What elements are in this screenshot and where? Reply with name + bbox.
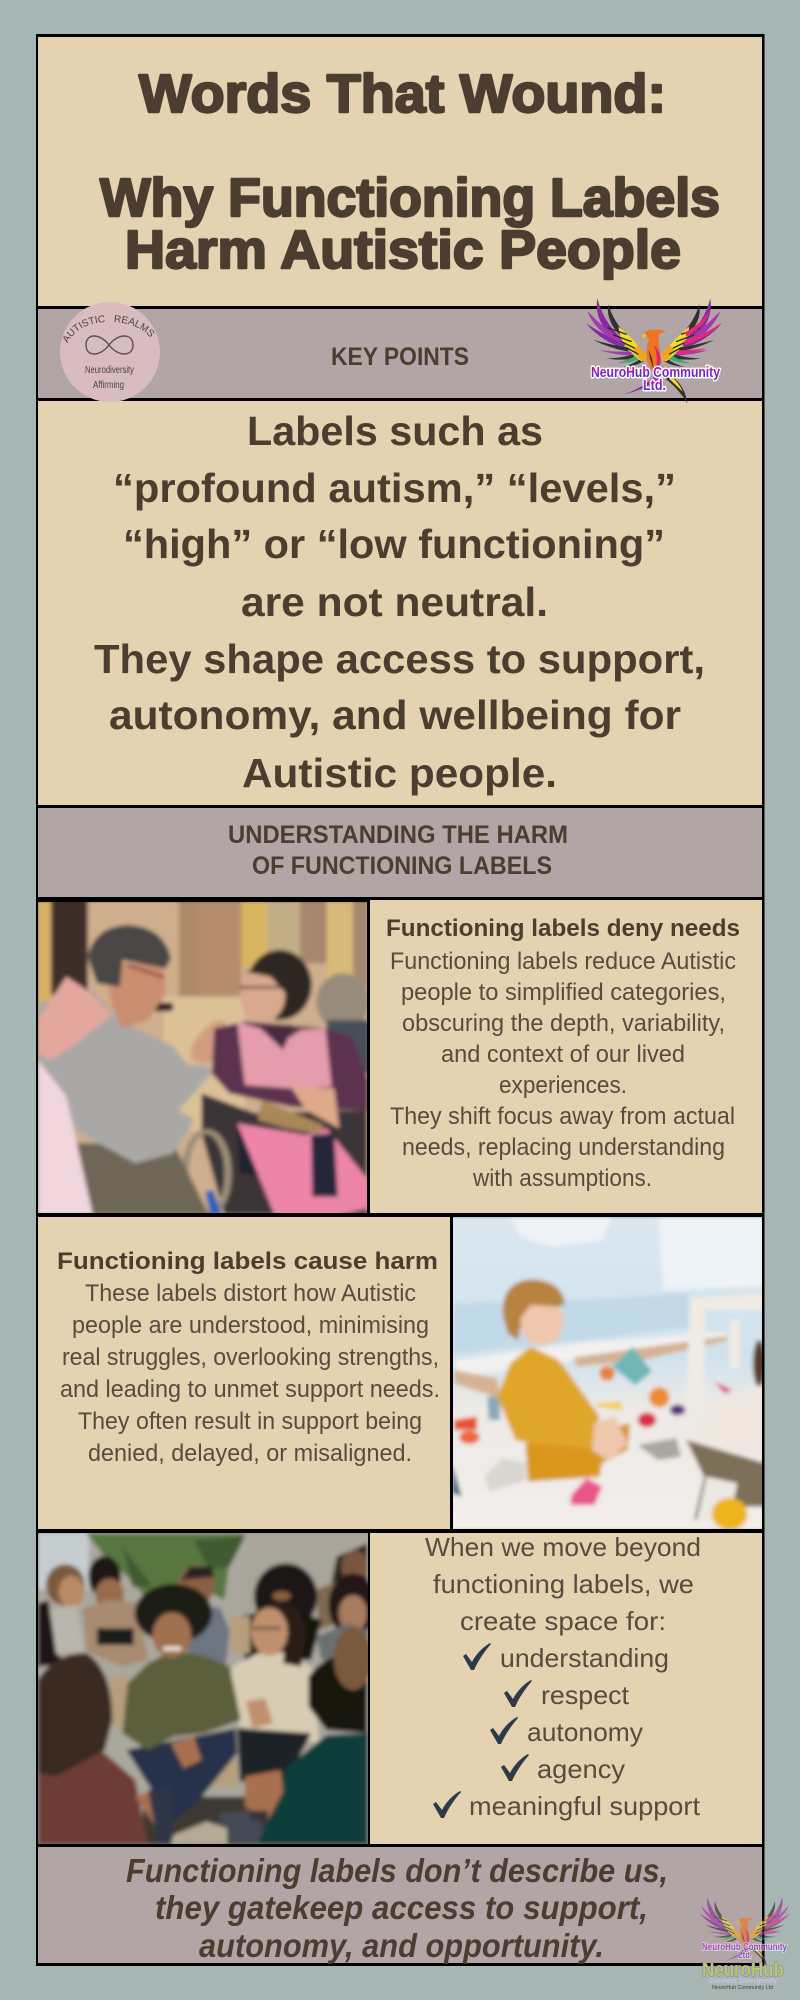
panel: photo of child playing in salt room bbox=[449, 1215, 765, 1532]
body text: denied, delayed, or misaligned. bbox=[88, 1440, 412, 1467]
body text: needs, replacing understanding bbox=[402, 1134, 725, 1161]
panel: key message bbox=[38, 401, 762, 805]
panel: functioning labels cause harm bbox=[38, 1217, 450, 1529]
logo: Autistic Realms: AUTISTIC bbox=[63, 315, 105, 344]
closing text bbox=[126, 1852, 668, 1964]
body text: Functioning labels reduce Autistic bbox=[390, 948, 736, 975]
panel: title bbox=[38, 37, 762, 306]
child bbox=[526, 1423, 630, 1482]
table bbox=[686, 1293, 765, 1404]
key points heading: KEY POINTS bbox=[331, 343, 469, 371]
closing text: they gatekeep access to support, bbox=[155, 1889, 648, 1926]
logo: Autistic Realms bbox=[60, 302, 160, 402]
key message text: “high” or “low functioning” bbox=[123, 521, 665, 567]
heading: Functioning labels deny needs bbox=[386, 915, 740, 942]
logo: NeuroHub Community phoenix: NeuroHub Community bbox=[591, 364, 721, 381]
logo: NeuroHub Community phoenix bbox=[586, 298, 722, 403]
logo: NeuroHub Community phoenix: Ltd. bbox=[643, 377, 666, 394]
panel: photo of two wheelchair users talking bbox=[36, 900, 372, 1217]
title line 3: Harm Autistic People bbox=[125, 220, 681, 280]
plant bbox=[87, 1533, 245, 1600]
logo: NeuroHub footer: Ltd. bbox=[738, 1950, 752, 1960]
panel: understanding the harm heading bar: OF FUNCTIONING LABELS bbox=[252, 852, 552, 880]
heading: Functioning labels cause harm bbox=[57, 1248, 438, 1275]
panel: understanding the harm heading bar bbox=[38, 808, 762, 897]
panel: photo of a group of people in discussion bbox=[36, 1530, 378, 1847]
body text: They shift focus away from actual bbox=[390, 1103, 735, 1130]
closing text: autonomy, and opportunity. bbox=[199, 1927, 604, 1964]
body text: obscuring the depth, variability, bbox=[402, 1010, 725, 1037]
body text bbox=[60, 1280, 440, 1467]
far right woman bbox=[326, 1572, 368, 1632]
woman bbox=[212, 1022, 368, 1110]
chairs bbox=[110, 1617, 250, 1787]
checklist item: respect: respect bbox=[541, 1680, 630, 1710]
checklist item: respect bbox=[504, 1680, 630, 1710]
logo: Autistic Realms: Affirming bbox=[93, 380, 124, 391]
man bbox=[74, 1143, 209, 1215]
central woman bbox=[127, 1728, 237, 1822]
second child and bucket bbox=[742, 1384, 762, 1398]
closing text: Functioning labels don’t describe us, bbox=[126, 1852, 668, 1889]
toys bbox=[612, 1347, 652, 1385]
body text: people are understood, minimising bbox=[72, 1312, 429, 1339]
intro text: create space for: bbox=[460, 1606, 666, 1636]
blurred hand and pink garment foreground bbox=[38, 977, 112, 1060]
logo: NeuroHub footer: Connect Divergently bbox=[709, 1978, 777, 1985]
woman with glasses bbox=[230, 1652, 319, 1743]
key message text: Labels such as bbox=[247, 408, 543, 454]
key message text: “profound autism,” “levels,” bbox=[113, 465, 676, 511]
checklist item: agency: agency bbox=[537, 1754, 625, 1784]
intro text bbox=[425, 1532, 701, 1636]
panel: closing statement bbox=[38, 1847, 762, 1964]
panel: key points bar bbox=[38, 309, 762, 398]
key message text: are not neutral. bbox=[241, 579, 548, 625]
body text: and leading to unmet support needs. bbox=[60, 1376, 440, 1403]
wheelchair and floor bbox=[202, 1093, 367, 1215]
checklist item: autonomy: autonomy bbox=[527, 1717, 643, 1747]
back row bbox=[330, 1542, 368, 1586]
logo: NeuroHub footer: NeuroHub Community Ltd bbox=[712, 1985, 773, 1991]
key message text bbox=[94, 408, 705, 796]
checklist item: meaningful support: meaningful support bbox=[469, 1791, 701, 1821]
panel: functioning labels deny needs bbox=[370, 900, 762, 1213]
icon: infinity bbox=[86, 336, 133, 354]
logo: NeuroHub footer: NeuroHub bbox=[702, 1960, 784, 1981]
left women bbox=[46, 1564, 85, 1606]
foreground left person bbox=[38, 1747, 148, 1845]
logo: NeuroHub footer bbox=[700, 1897, 790, 1991]
foreground right person bbox=[219, 1810, 270, 1845]
title line 1: Words That Wound: bbox=[139, 64, 666, 124]
logo: Autistic Realms: REALMS bbox=[114, 315, 154, 337]
logo: Autistic Realms: Neurodiversity bbox=[85, 365, 134, 376]
intro text: When we move beyond bbox=[425, 1532, 701, 1562]
body text bbox=[390, 948, 736, 1192]
body text: and context of our lived bbox=[441, 1041, 685, 1068]
key message text: They shape access to support, bbox=[94, 636, 705, 682]
title line 2: Why Functioning Labels bbox=[100, 168, 720, 228]
checklist item: agency bbox=[501, 1754, 625, 1784]
body text: They often result in support being bbox=[78, 1408, 422, 1435]
key message text: autonomy, and wellbeing for bbox=[109, 692, 681, 738]
body text: experiences. bbox=[499, 1072, 627, 1099]
intro text: functioning labels, we bbox=[433, 1569, 694, 1599]
body text: people to simplified categories, bbox=[401, 979, 726, 1006]
panel: moving beyond functioning labels bbox=[370, 1532, 762, 1844]
checklist item: understanding: understanding bbox=[500, 1643, 669, 1673]
section heading: UNDERSTANDING THE HARM bbox=[228, 821, 568, 849]
key message text: Autistic people. bbox=[242, 750, 557, 796]
body text: with assumptions. bbox=[472, 1165, 652, 1192]
body text: real struggles, overlooking strengths, bbox=[62, 1344, 439, 1371]
body text: These labels distort how Autistic bbox=[85, 1280, 416, 1307]
